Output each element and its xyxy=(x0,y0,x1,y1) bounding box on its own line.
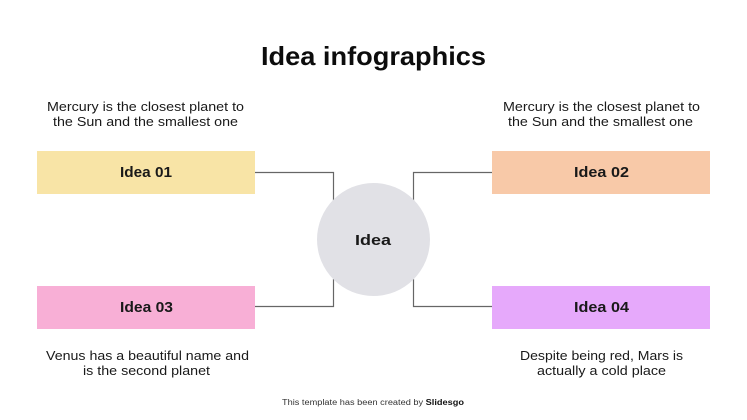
panel: idea 04: Idea 04 xyxy=(574,299,630,316)
text block: idea 01 description xyxy=(47,99,244,129)
text block: idea 02 description: the Sun and the smallest one xyxy=(508,114,693,129)
panel: idea 03: Idea 03 xyxy=(120,299,173,316)
panel: idea 04 xyxy=(492,286,710,329)
centre node xyxy=(317,183,430,296)
text block: idea 04 description: Despite being red, Mars is xyxy=(520,348,684,363)
footer credit: This template has been created by Slidesgo xyxy=(282,398,464,407)
text block: idea 01 description: Mercury is the closest planet to xyxy=(47,99,244,114)
panel: idea 02 xyxy=(492,151,710,194)
text block: idea 04 description: actually a cold place xyxy=(537,363,666,378)
text block: idea 03 description xyxy=(46,348,249,378)
text block: idea 04 description xyxy=(520,348,684,378)
text block: idea 01 description: the Sun and the smallest one xyxy=(53,114,238,129)
centre node: Idea xyxy=(355,232,392,249)
panel: idea 02: Idea 02 xyxy=(574,164,629,181)
connector: idea 01 to centre xyxy=(255,172,334,205)
title: Idea infographics xyxy=(261,41,486,71)
text block: idea 03 description: Venus has a beautiful name and xyxy=(46,348,249,363)
connector: idea 02 to centre xyxy=(414,172,492,205)
text block: idea 02 description: Mercury is the closest planet to xyxy=(503,99,700,114)
panel: idea 01 xyxy=(37,151,255,194)
connector: idea 04 to centre xyxy=(414,279,492,306)
panel: idea 03 xyxy=(37,286,255,329)
panel: idea 01: Idea 01 xyxy=(120,164,172,181)
connector: idea 03 to centre xyxy=(255,279,334,306)
text block: idea 03 description: is the second planet xyxy=(83,363,210,378)
text block: idea 02 description xyxy=(503,99,700,129)
